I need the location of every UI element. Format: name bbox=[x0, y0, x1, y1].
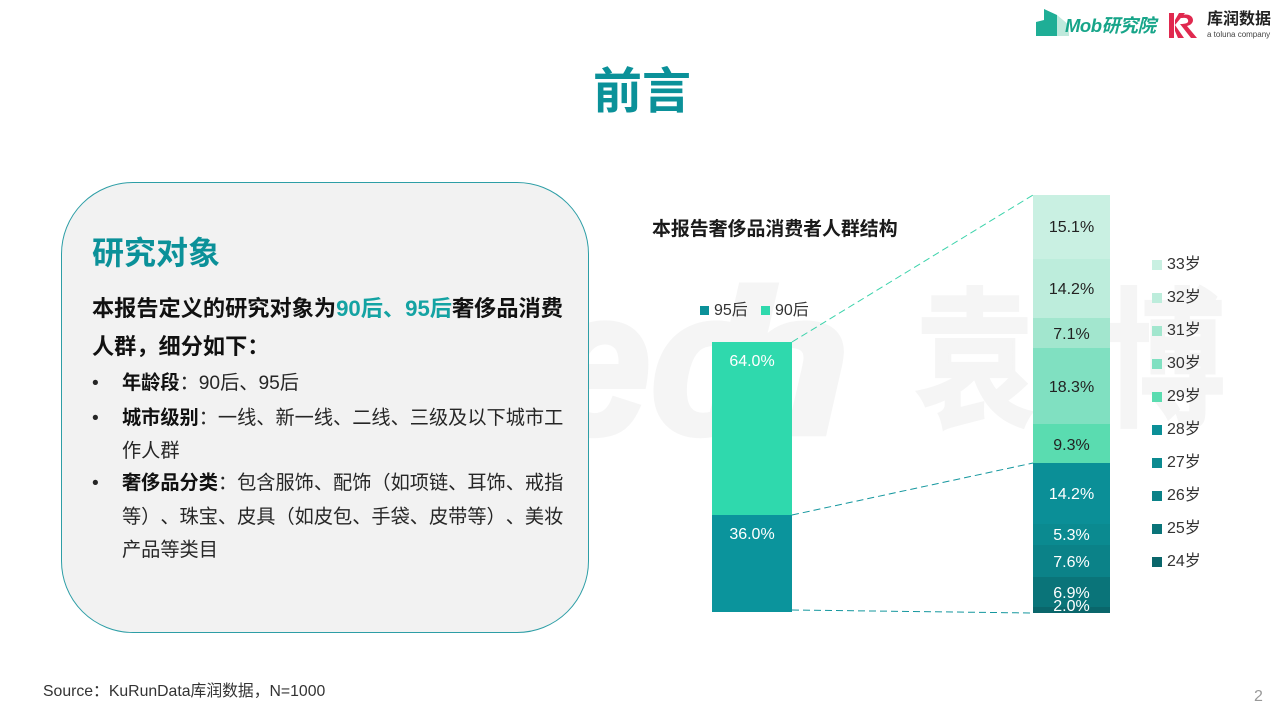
legend: generation: 90后 bbox=[775, 302, 809, 319]
page number: 2 bbox=[1254, 688, 1263, 705]
legend item bbox=[1152, 255, 1201, 273]
legend item bbox=[1152, 288, 1201, 306]
bullet: age: • bbox=[92, 373, 99, 394]
legend: generation: 95后 bbox=[714, 302, 748, 319]
stacked bar: age split: 2.0% bbox=[1053, 598, 1090, 615]
legend item bbox=[1152, 519, 1201, 537]
panel heading: 研究对象 bbox=[92, 235, 220, 271]
segment: 24岁 bbox=[1033, 607, 1110, 613]
segment: 28岁: 14.2% bbox=[1049, 486, 1094, 502]
tagline: a toluna company bbox=[1207, 30, 1270, 39]
bullet: luxury categories bbox=[92, 472, 563, 561]
legend item: 32岁 bbox=[1167, 289, 1201, 306]
bullet: luxury categories: 等）、珠宝、皮具（如皮包、手袋、皮带等）、美妆 bbox=[122, 507, 563, 528]
title: 前言 bbox=[593, 65, 691, 119]
segment: 31岁 bbox=[1033, 318, 1110, 348]
legend item bbox=[1152, 552, 1201, 570]
legend item: 29岁 bbox=[1167, 388, 1201, 405]
segment: 33岁 bbox=[1033, 195, 1110, 259]
segment: 27岁 bbox=[1033, 524, 1110, 545]
bullet: luxury categories: 奢侈品分类：包含服饰、配饰（如项链、耳饰、戒指 bbox=[122, 473, 563, 494]
legend item bbox=[1152, 354, 1201, 372]
watermark: eo bbox=[545, 249, 767, 476]
segment: 90后 64.0%: 64.0% bbox=[729, 353, 775, 370]
segment: 25岁 bbox=[1033, 577, 1110, 607]
segment: 26岁: 7.6% bbox=[1053, 554, 1090, 571]
legend item: 33岁 bbox=[1167, 256, 1201, 273]
source note: Source：KuRunData库润数据，N=1000 bbox=[43, 683, 325, 700]
segment: 25岁: 6.9% bbox=[1053, 585, 1090, 602]
segment: 95后 36.0% bbox=[712, 515, 792, 612]
legend item: 24岁 bbox=[1167, 553, 1201, 570]
icon: Mob building bbox=[1036, 9, 1069, 36]
segment: 30岁 bbox=[1033, 348, 1110, 424]
bullet: city tier: • bbox=[92, 408, 99, 429]
stacked bar: age split bbox=[1033, 195, 1110, 615]
segment: 32岁: 14.2% bbox=[1049, 280, 1094, 298]
watermark: 袁 bbox=[915, 241, 1035, 458]
watermark: h bbox=[705, 249, 850, 476]
stacked bar: generation split bbox=[712, 342, 792, 612]
legend: generation bbox=[700, 302, 809, 319]
panel: research subject bbox=[61, 182, 589, 633]
legend item: 27岁 bbox=[1167, 454, 1201, 471]
legend item: 26岁 bbox=[1167, 487, 1201, 504]
intro text bbox=[92, 296, 563, 359]
segment: 29岁 bbox=[1033, 424, 1110, 463]
watermark: 博 bbox=[1105, 241, 1225, 458]
segment: 28岁 bbox=[1033, 463, 1110, 524]
segment: 27岁: 5.3% bbox=[1053, 526, 1090, 544]
segment: 26岁 bbox=[1033, 545, 1110, 577]
legend item: 30岁 bbox=[1167, 355, 1201, 372]
legend: ages bbox=[1152, 255, 1201, 570]
segment: 29岁: 9.3% bbox=[1053, 436, 1090, 454]
segment: 30岁: 18.3% bbox=[1049, 379, 1094, 396]
legend item bbox=[1152, 387, 1201, 405]
icon: KuRun R mark bbox=[1169, 13, 1197, 38]
bullet: luxury categories: • bbox=[92, 473, 99, 494]
intro text: 人群，细分如下： bbox=[92, 334, 270, 359]
legend item bbox=[1152, 321, 1201, 339]
Mob brand name: Mob研究院 bbox=[1065, 15, 1156, 36]
bullet: age: 年龄段：90后、95后 bbox=[122, 373, 299, 394]
bullet: city tier: 作人群 bbox=[122, 441, 180, 462]
segment: 33岁: 15.1% bbox=[1049, 219, 1094, 236]
segment: 32岁 bbox=[1033, 259, 1110, 318]
bullet: city tier bbox=[92, 407, 563, 462]
KuRun brand name: 库润数据 bbox=[1207, 11, 1271, 28]
legend item: 28岁 bbox=[1167, 421, 1201, 438]
chart title: 本报告奢侈品消费者人群结构 bbox=[652, 219, 898, 240]
bullet: city tier: 城市级别：一线、新一线、二线、三级及以下城市工 bbox=[122, 408, 563, 429]
legend item bbox=[1152, 486, 1201, 504]
segment: 90后 64.0% bbox=[712, 342, 792, 515]
segment: 95后 36.0%: 36.0% bbox=[729, 526, 775, 543]
segment: 31岁: 7.1% bbox=[1053, 326, 1090, 343]
legend item bbox=[1152, 420, 1201, 438]
legend item: 25岁 bbox=[1167, 520, 1201, 537]
logo: Mob研究院 and 库润数据 bbox=[1036, 9, 1271, 39]
legend item: 31岁 bbox=[1167, 322, 1201, 339]
bullet: luxury categories: 产品等类目 bbox=[122, 540, 218, 561]
intro text: 本报告定义的研究对象为90后、95后奢侈品消费 bbox=[92, 296, 563, 321]
legend item bbox=[1152, 453, 1201, 471]
